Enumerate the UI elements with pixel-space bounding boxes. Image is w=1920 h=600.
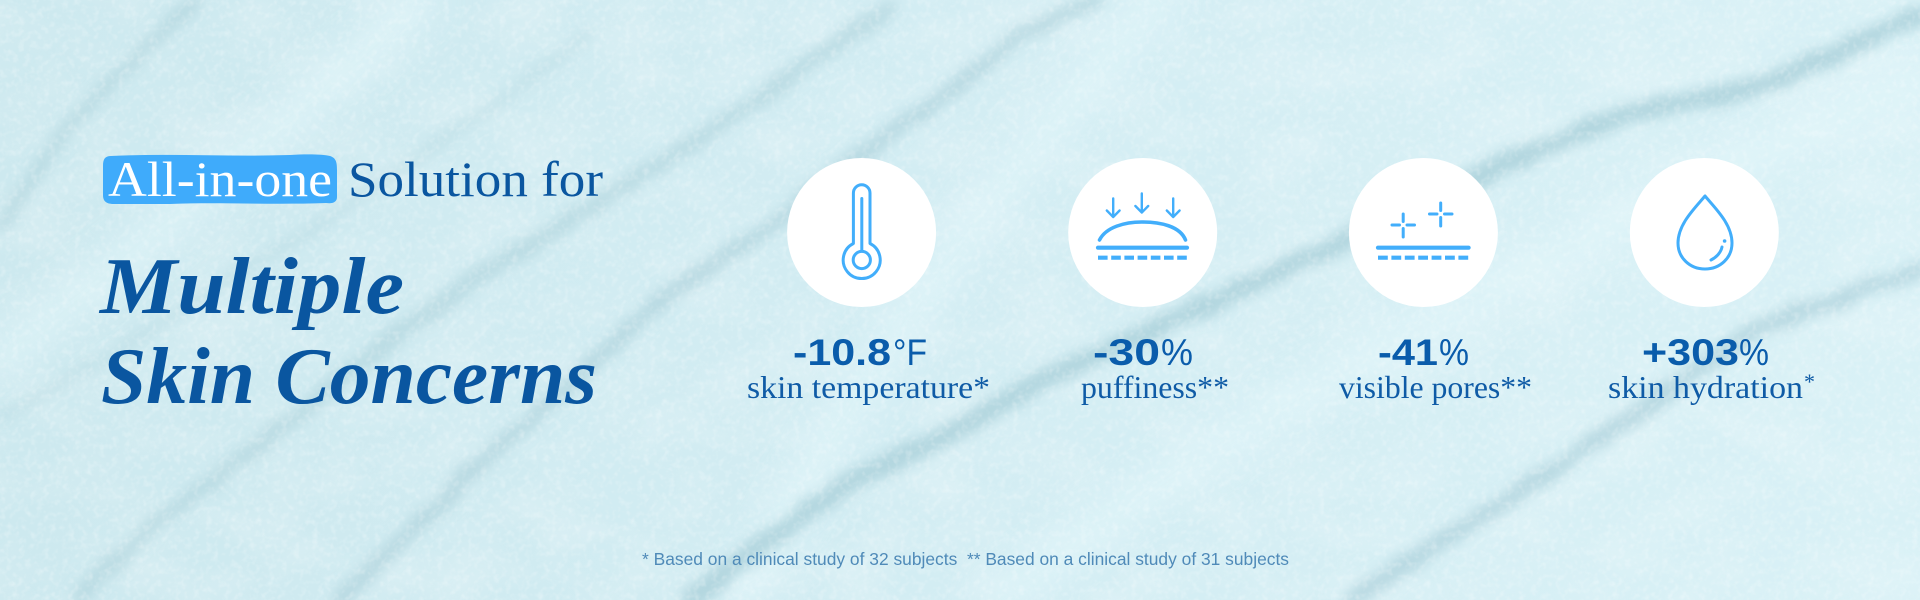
icon: puffy skin with arrows — [1068, 158, 1217, 307]
stat: skin hydration — [1608, 158, 1815, 405]
value: % — [1439, 332, 1469, 373]
footnote: * Based on a clinical study of 32 subjects ** Based on a clinical study of 31 subjects — [642, 549, 1289, 569]
highlighted words: All-in-one — [108, 151, 332, 207]
value: °F — [893, 332, 927, 373]
label: skin hydration — [1608, 369, 1803, 405]
value — [1642, 332, 1769, 373]
heading: first line — [103, 151, 603, 207]
label: * — [1804, 369, 1815, 394]
heading: Multiple Skin Concerns: Multiple — [98, 243, 404, 331]
value: +303 — [1642, 332, 1739, 373]
heading: Multiple Skin Concerns: Skin Concerns — [101, 333, 597, 421]
stat: puffiness — [1068, 158, 1229, 405]
icon: pores with sparkles — [1349, 158, 1498, 307]
value: -30 — [1093, 332, 1160, 373]
icon: water drop — [1630, 158, 1779, 307]
icon: thermometer — [787, 158, 936, 307]
value — [793, 332, 927, 373]
value — [1093, 332, 1193, 373]
value: -41 — [1378, 332, 1438, 373]
value: % — [1161, 332, 1193, 373]
label: visible pores** — [1339, 369, 1532, 405]
remaining words: Solution for — [348, 151, 603, 207]
value: % — [1739, 332, 1769, 373]
value — [1378, 332, 1469, 373]
label: puffiness** — [1081, 369, 1229, 405]
value: -10.8 — [793, 332, 891, 373]
stat: skin temperature — [747, 158, 990, 405]
stat: visible pores — [1339, 158, 1532, 405]
heading: Multiple Skin Concerns — [98, 243, 597, 421]
highlight pill behind All-in-one — [103, 154, 337, 204]
label: skin temperature* — [747, 369, 990, 405]
